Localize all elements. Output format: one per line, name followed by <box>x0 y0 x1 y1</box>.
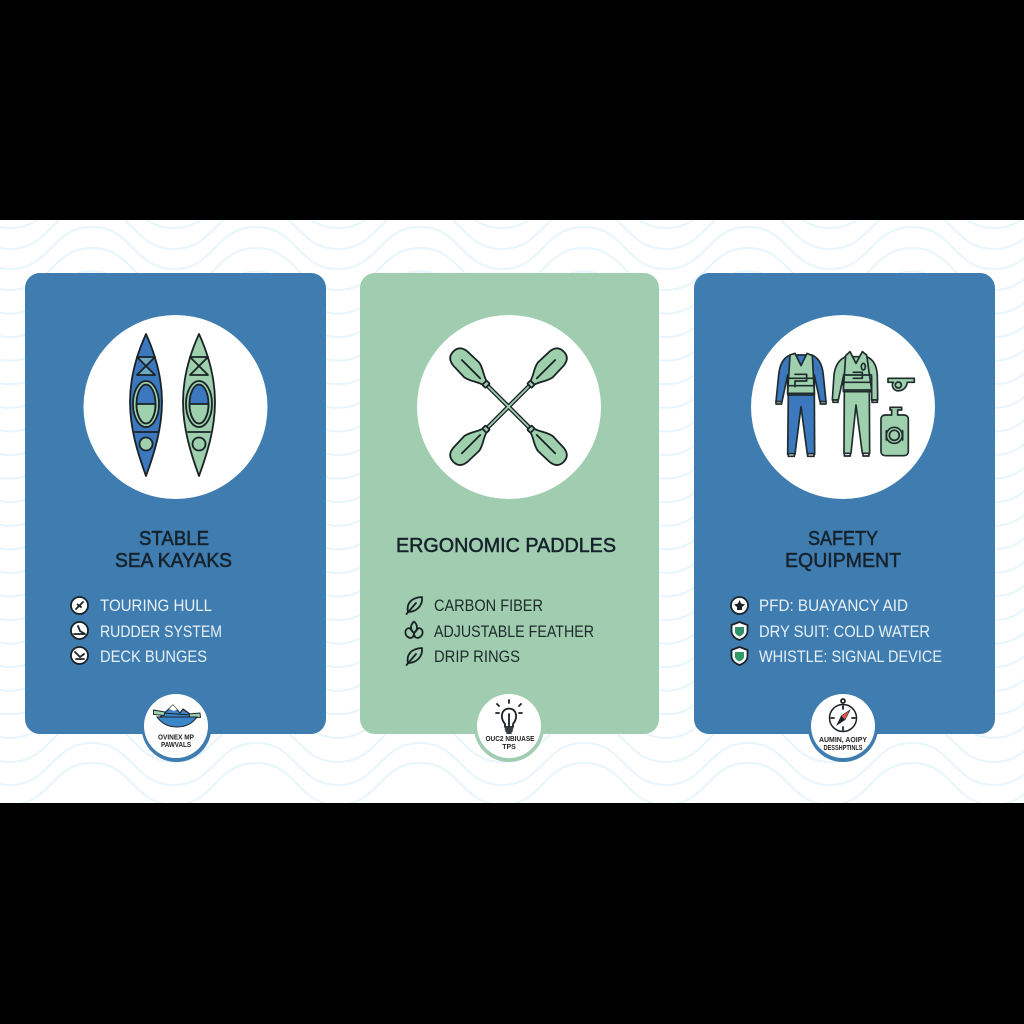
list: safety features: DRY SUIT: COLD WATER <box>759 623 930 641</box>
list: paddle features: DRIP RINGS <box>434 648 520 666</box>
background wave band <box>0 186 1024 805</box>
heading: stable sea kayaks: STABLE <box>139 528 209 550</box>
badge: kayak tips: OVINEX MP <box>158 734 194 742</box>
badge: compass essentials <box>808 692 878 762</box>
heading: ergonomic paddles: ERGONOMIC PADDLES <box>396 535 616 557</box>
badge: quick tips <box>474 692 544 762</box>
list: kayak features: DECK BUNGES <box>100 648 207 666</box>
list: kayak features: RUDDER SYSTEM <box>100 623 222 641</box>
badge: kayak tips <box>142 692 212 762</box>
list: kayak features <box>71 597 222 666</box>
heading: stable sea kayaks <box>115 528 232 572</box>
icon: dry bag canister <box>881 407 908 456</box>
list: kayak features: TOURING HULL <box>100 597 212 615</box>
list: paddle features: ADJUSTABLE FEATHER <box>434 623 594 641</box>
list: paddle features: CARBON FIBER <box>434 597 543 615</box>
badge: kayak tips: PAWVALS <box>161 742 191 749</box>
icon: crossed paddles <box>446 344 571 469</box>
panel: ergonomic paddles <box>360 273 659 762</box>
badge: quick tips: OUC2 NBIUASE <box>486 736 535 743</box>
icon: green dry suit with vest <box>832 352 878 456</box>
list: safety features <box>731 597 942 666</box>
heading: stable sea kayaks: SEA KAYAKS <box>115 550 232 572</box>
icon: whistle <box>888 378 914 391</box>
icon: dry suits, whistle and dry bag <box>776 352 914 456</box>
badge: compass essentials: DESSHPTINLS <box>824 745 863 752</box>
heading: safety equipment <box>785 528 901 572</box>
panel: stable sea kayaks <box>25 273 326 762</box>
heading: safety equipment: SAFETY <box>808 528 878 550</box>
panel: safety equipment <box>694 273 995 762</box>
list: safety features: PFD: BUAYANCY AID <box>759 597 908 615</box>
heading: safety equipment: EQUIPMENT <box>785 550 901 572</box>
list: paddle features <box>405 597 594 666</box>
icon: blue dry suit with vest <box>776 353 826 456</box>
badge: quick tips: TPS <box>502 744 516 751</box>
list: safety features: WHISTLE: SIGNAL DEVICE <box>759 648 942 666</box>
icon: two sea kayaks <box>130 334 215 476</box>
badge: compass essentials: AUMIN, AOIPY <box>819 737 867 744</box>
